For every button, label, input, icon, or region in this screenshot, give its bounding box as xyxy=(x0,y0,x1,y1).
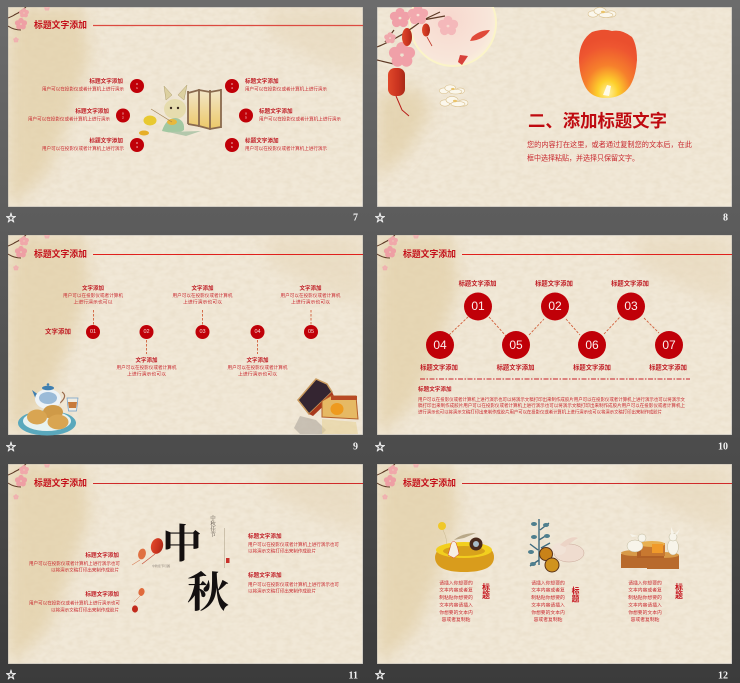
heading: slide 10 title: 标题文字添加 xyxy=(403,248,456,259)
text block: column 3 xyxy=(628,580,662,623)
icon: number badge 6: 6 xyxy=(231,145,233,149)
text block: node 01 xyxy=(63,284,123,306)
vertical heading 3 xyxy=(675,582,683,600)
icon: star: ☆ xyxy=(375,212,385,224)
number circles: 07 xyxy=(662,338,676,352)
text block: node 02: 文字添加 xyxy=(135,356,158,364)
text block: node 05: 文字添加 xyxy=(299,284,322,292)
icon: number badge 6 xyxy=(225,138,239,152)
moon xyxy=(410,0,496,66)
heading: section title: 二、添加标题文字 xyxy=(528,111,667,131)
icon: number badge 3: 3 xyxy=(136,145,138,149)
text block: summary: 稿打印出来制作成胶片用户可以在投影仪或者计算机上进行演示也可以将演示文稿打印出来制作成胶片用户可以在投影仪或者计算机上 xyxy=(418,402,685,409)
text block: right item 2: 标题文字添加 xyxy=(259,107,293,115)
text block: right upper xyxy=(248,532,339,554)
number circles: 02 xyxy=(548,299,562,313)
vertical heading 2 xyxy=(572,586,580,604)
text block: right upper: 用户可以在投影仪或者计算机上进行演示也可 xyxy=(248,541,339,548)
calligraphy: 中秋: 中 xyxy=(162,512,202,570)
text block: right item 3 xyxy=(245,136,327,152)
text block: node 05 xyxy=(280,284,341,306)
text block: left item 1: 用户可以在投影仪或者计算机上进行演示 xyxy=(42,86,124,92)
text block: left lower: 以将演示文稿打印出来制作成胶片 xyxy=(51,606,119,614)
lanterns xyxy=(388,24,432,116)
text block: left upper: 标题文字添加 xyxy=(85,551,119,559)
text block: node 02: 用户可以在投影仪或者计算机 xyxy=(116,364,177,371)
circle labels: 标题文字添加 xyxy=(420,362,458,372)
text block: right item 3: 用户可以在投影仪或者计算机上进行演示 xyxy=(245,145,327,152)
icon: teapot and mooncakes xyxy=(18,383,78,436)
text block: column 3: 文本内容请插入 xyxy=(628,602,662,608)
calligraphy: 中秋: 秋 xyxy=(187,560,229,620)
connector arrows xyxy=(449,317,659,336)
icon: number badge 2: 0 xyxy=(122,112,124,116)
icon: number badge 3: 0 xyxy=(136,141,138,145)
text block: column 3: 容或者复制粘 xyxy=(631,616,660,623)
number circles: 05 xyxy=(509,338,523,352)
icon: cut mooncakes xyxy=(294,379,358,434)
text block: node 02: 上进行演示也可以 xyxy=(127,370,166,378)
text block: node 03: 用户可以在投影仪或者计算机 xyxy=(172,292,233,299)
calligraphy: 中秋: 中秋佳节月圆 xyxy=(152,563,170,568)
text block: node 01: 文字添加 xyxy=(82,284,104,292)
icon: star: ☆ xyxy=(6,442,16,454)
text block: column 1: 制粘贴你想要的 xyxy=(439,594,473,601)
timeline nodes: 01 xyxy=(90,329,96,335)
text block: right item 1 xyxy=(245,77,327,92)
axis label: 文字添加 xyxy=(45,326,71,336)
text block: column 1: 文本内容请插入 xyxy=(439,602,473,608)
timeline nodes: 05 xyxy=(308,329,314,335)
text block: right lower xyxy=(248,571,339,594)
text block: right item 1: 标题文字添加 xyxy=(245,77,279,85)
icon: number badge 2 xyxy=(116,108,130,122)
text block: section description xyxy=(527,140,692,162)
text block: summary: 进行演示也可以将演示文稿打印出来制作成胶片用户可以在投影仪或者计算机上进行演示也可以将演示文稿打印出来制作成胶片 xyxy=(418,408,662,416)
text block: column 1: 请插入你想要的 xyxy=(439,580,473,586)
icon: number badge 1: 0 xyxy=(136,82,138,86)
calligraphy: 中秋 xyxy=(152,512,230,620)
number circles: 01 xyxy=(471,299,485,313)
number circles: 06 xyxy=(585,338,599,352)
circle labels: 标题文字添加 xyxy=(459,278,496,288)
text block: right item 1: 用户可以在投影仪或者计算机上进行演示 xyxy=(245,86,327,92)
text block: column 1: 容或者复制粘 xyxy=(442,616,471,623)
text block: left lower: 标题文字添加 xyxy=(85,590,119,598)
vertical heading 1: 标 xyxy=(482,582,490,592)
text block: left upper: 以将演示文稿打印出来制作成胶片 xyxy=(51,566,119,574)
text block: column 1 xyxy=(439,580,473,623)
icon: star: ☆ xyxy=(6,670,16,682)
timeline nodes: 02 xyxy=(143,329,150,335)
text block: right lower: 用户可以在投影仪或者计算机上进行演示也可 xyxy=(248,581,339,588)
icon: number badge 1: 1 xyxy=(136,86,138,90)
text block: left item 3 xyxy=(42,136,124,152)
text block: section description: 框中选择粘贴，并选择只保留文字。 xyxy=(527,154,639,162)
timeline nodes: 03 xyxy=(199,329,206,335)
icon: number badge 4 xyxy=(225,79,239,93)
text block: node 04 xyxy=(228,356,288,378)
brown wash xyxy=(377,85,432,180)
circle labels xyxy=(420,278,687,372)
icon: rabbit with folding screen xyxy=(139,85,221,136)
text block: right lower: 标题文字添加 xyxy=(248,571,282,579)
clouds xyxy=(439,7,616,107)
text block: left item 2: 标题文字添加 xyxy=(75,107,109,115)
text block: column 2 xyxy=(531,580,565,623)
text block: left lower xyxy=(29,590,120,614)
number circles: 04 xyxy=(433,338,447,352)
number circles: 03 xyxy=(624,299,638,313)
calligraphy: 中秋: 中秋佳节 xyxy=(209,514,217,538)
slide number 10: 10 xyxy=(718,442,728,452)
vertical heading 2: 标 xyxy=(572,586,580,596)
icon: star: ☆ xyxy=(6,212,16,224)
text block: node 04: 用户可以在投影仪或者计算机 xyxy=(228,364,288,371)
circle labels: 标题文字添加 xyxy=(649,362,687,372)
circle labels: 标题文字添加 xyxy=(535,278,573,288)
text block: node 03 xyxy=(172,284,233,306)
text block: left item 2 xyxy=(28,107,110,122)
vertical heading 2: 题 xyxy=(572,594,580,604)
text block: right lower: 以将演示文稿打印出来制作成胶片 xyxy=(248,588,316,594)
text block: node 01: 上进行演示也可以 xyxy=(74,298,113,306)
text block: section description: 您的内容打在这里，或者通过复制您的文本后，在此 xyxy=(527,140,692,149)
text block: column 2: 你想要的文本内 xyxy=(531,609,565,616)
text block: column 2: 文本内容请插入 xyxy=(531,602,565,608)
text block: column 3: 你想要的文本内 xyxy=(628,609,662,616)
circle labels: 标题文字添加 xyxy=(573,362,611,372)
icon: mooncake with balloon xyxy=(435,522,494,572)
slide number 11: 11 xyxy=(349,670,358,682)
vertical heading 1 xyxy=(482,582,490,600)
circle labels: 标题文字添加 xyxy=(611,278,649,288)
icon: number badge 1 xyxy=(130,79,144,93)
heading: slide 12 title: 标题文字添加 xyxy=(403,477,456,488)
text block: node 05: 用户可以在投影仪或者计算机 xyxy=(280,292,341,299)
text block: right item 3: 标题文字添加 xyxy=(245,136,279,144)
text block: column 1: 你想要的文本内 xyxy=(439,609,473,616)
text block: node 05: 上进行演示也可以 xyxy=(291,298,330,306)
text block: left item 3: 用户可以在投影仪或者计算机上进行演示 xyxy=(42,145,124,152)
panel: slide 8 xyxy=(375,0,732,224)
text block: left item 1 xyxy=(42,77,124,92)
text block: right item 2 xyxy=(259,107,341,122)
text block: left lower: 用户可以在投影仪或者计算机上进行演示也可 xyxy=(29,600,120,606)
number circles xyxy=(426,292,683,359)
circle labels: 标题文字添加 xyxy=(497,362,534,372)
icon: number badge 5: 5 xyxy=(245,116,247,120)
icon: sky lantern xyxy=(579,30,637,98)
text block: left upper: 用户可以在投影仪或者计算机上进行演示也可 xyxy=(29,560,120,567)
panel: slide 10 xyxy=(375,233,732,454)
icon: number badge 4: 4 xyxy=(231,86,233,90)
heading: slide 9 title: 标题文字添加 xyxy=(34,248,87,259)
text block: node 03: 文字添加 xyxy=(191,284,214,292)
panel: slide 9 xyxy=(6,233,363,454)
slide number 7: 7 xyxy=(353,212,358,224)
icon: rabbits on mooncakes xyxy=(621,527,680,569)
text block: node 04: 文字添加 xyxy=(246,356,269,364)
panel: slide 7 xyxy=(6,5,363,224)
text block: right upper: 标题文字添加 xyxy=(248,532,282,540)
timeline nodes xyxy=(86,310,318,354)
icon: number badge 3 xyxy=(130,138,144,152)
icon: rabbit with leaves xyxy=(528,519,584,572)
icon: number badge 5: 0 xyxy=(245,112,247,116)
text block: column 2: 请插入你想要的 xyxy=(531,580,565,586)
vertical heading 1: 题 xyxy=(482,591,490,600)
text block: summary: 标题文字添加 xyxy=(418,385,452,393)
lanterns xyxy=(132,537,165,613)
text block: summary: 用户可以在投影仪或者计算机上进行演示也可以将演示文稿打印出来制作成胶片用户可以在投影仪或者计算机上进行演示也可以将演示文 xyxy=(418,396,685,403)
heading: slide 11 title: 标题文字添加 xyxy=(34,477,87,488)
icon: number badge 4: 0 xyxy=(231,82,233,86)
text block: column 1: 文本内容或者复 xyxy=(439,586,473,594)
text block: left item 1: 标题文字添加 xyxy=(89,77,123,85)
text block: node 04: 上进行演示也可以 xyxy=(238,370,277,378)
panel: slide 12 xyxy=(375,462,732,682)
text block: summary xyxy=(418,385,685,416)
text block: right upper: 以将演示文稿打印出来制作成胶片 xyxy=(248,548,316,554)
slide number 12: 12 xyxy=(718,670,728,682)
vertical heading 3: 标 xyxy=(675,582,683,592)
slide number 8: 8 xyxy=(723,212,728,224)
heading: slide 7 title: 标题文字添加 xyxy=(34,19,87,30)
text block: left item 3: 标题文字添加 xyxy=(89,136,123,144)
panel: slide 11 xyxy=(6,462,363,682)
text block: left upper xyxy=(29,551,120,574)
icon: star: ☆ xyxy=(375,670,385,682)
text block: left item 2: 用户可以在投影仪或者计算机上进行演示 xyxy=(28,116,110,122)
timeline nodes: 04 xyxy=(254,329,261,335)
slide number 9: 9 xyxy=(353,442,358,452)
text block: column 2: 制粘贴你想要的 xyxy=(531,594,565,601)
text block: column 3: 文本内容或者复 xyxy=(628,586,662,594)
text block: right item 2: 用户可以在投影仪或者计算机上进行演示 xyxy=(259,116,341,122)
text block: node 03: 上进行演示也可以 xyxy=(183,298,222,306)
text block: node 02 xyxy=(116,356,177,378)
vertical heading 3: 题 xyxy=(675,591,683,600)
text block: node 01: 用户可以在投影仪或者计算机 xyxy=(63,292,123,299)
text block: column 3: 请插入你想要的 xyxy=(628,580,662,586)
icon: number badge 6: 0 xyxy=(231,141,233,145)
icon: number badge 5 xyxy=(239,108,253,122)
text block: column 2: 容或者复制粘 xyxy=(534,616,563,623)
icon: star: ☆ xyxy=(375,442,385,454)
icon: number badge 2: 2 xyxy=(122,116,124,120)
text block: column 2: 文本内容或者复 xyxy=(531,586,565,594)
plum blossoms xyxy=(377,5,490,67)
text block: column 3: 制粘贴你想要的 xyxy=(628,594,662,601)
